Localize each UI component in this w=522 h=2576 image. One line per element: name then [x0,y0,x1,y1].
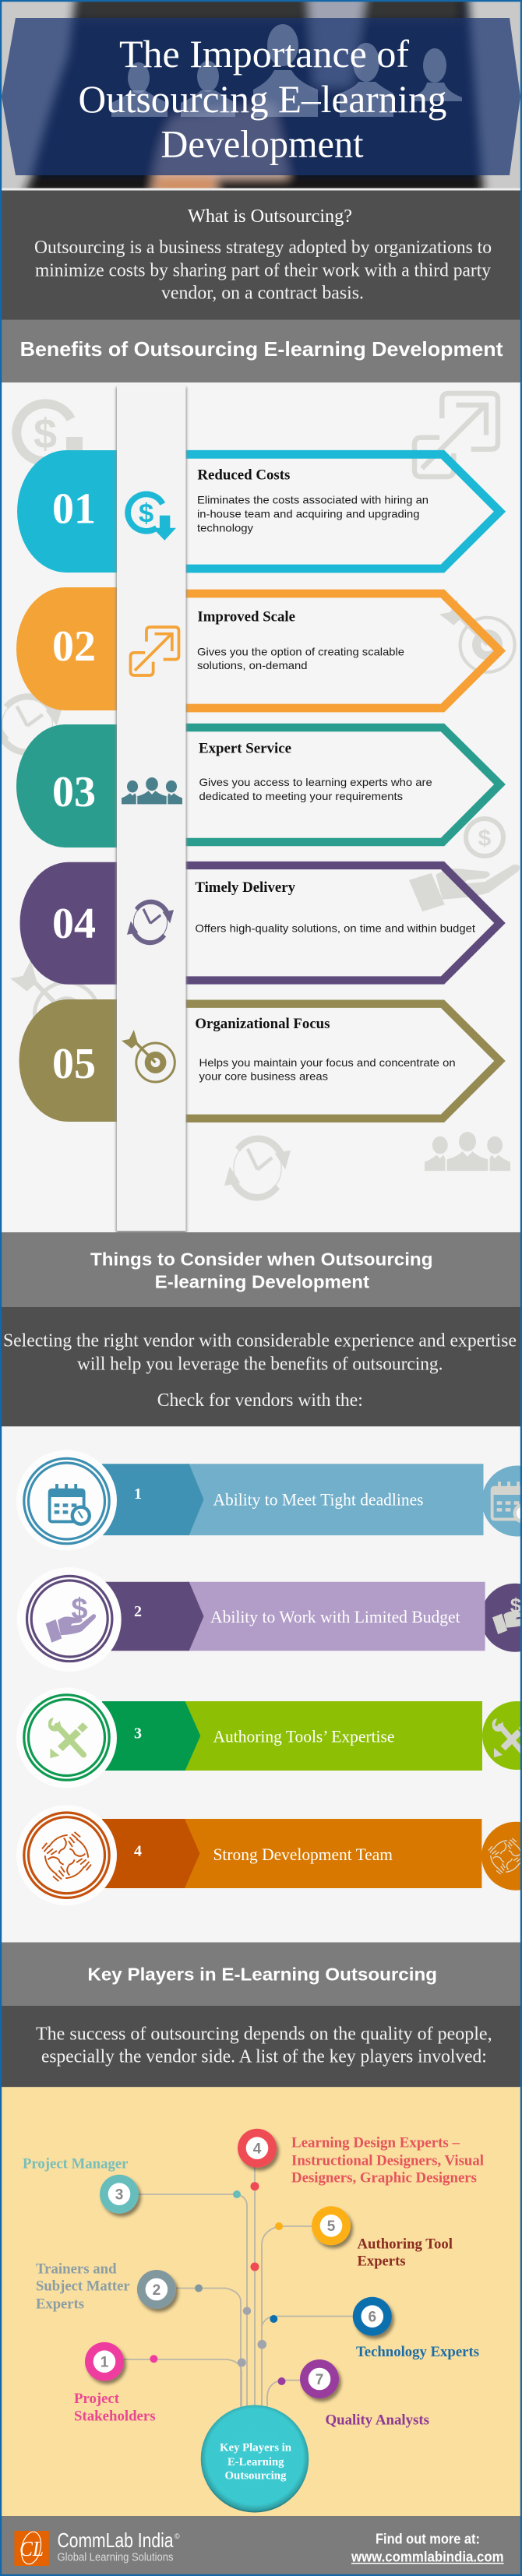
right circle with ghost hand [481,1584,522,1652]
find out more [351,2532,504,2564]
node 5: authoring tool experts: Authoring Tool [357,2236,453,2253]
logo: CommLab India: CommLab India [58,2528,174,2552]
central pillar [116,386,187,1232]
badge with tools icon [16,1687,117,1788]
connector dots [150,2182,285,2385]
find out more: www.commlabindia.com [351,2549,504,2564]
benefit text: organizational focus: Helps you maintain your focus and concentrate on [199,1056,456,1069]
node 6: technology experts [353,2297,479,2360]
node 4: learning design experts: Learning Design Experts – [291,2135,460,2151]
panel: key players diagram [0,2087,522,2516]
icon: expert team [122,777,182,804]
logo: CommLab India: © [175,2532,180,2540]
text: outsourcing definition [34,238,492,303]
logo: CommLab India: CL [19,2537,44,2560]
node 3: project manager: Project Manager [23,2155,129,2172]
node 7: quality analysts: 7 [316,2372,323,2388]
icon: target with arrow [122,1030,175,1082]
panel: success of outsourcing: especially the vendor side. A list of the key players involved: [41,2046,487,2067]
benefit text: improved scale: Gives you the option of creating scalable [197,646,404,658]
ribbon 3 [102,1701,482,1771]
ribbon 2: 2 [134,1603,142,1620]
right circle with ghost hand: $ [510,1594,522,1617]
right circle with ghost tools [482,1701,522,1770]
checklist row 3 [16,1687,522,1788]
node 2: trainers and subject matter experts: Trainers and [36,2261,117,2277]
icon: clock with arrows [127,902,174,943]
find out more: Find out more at: [376,2532,480,2547]
icon: team silhouettes [111,24,462,117]
node 4: learning design experts [238,2129,484,2187]
benefit 04 badge [20,862,117,985]
benefit text: expert service: Expert Service [199,741,291,757]
benefit text: organizational focus [195,1016,456,1083]
benefit 03 badge: 03 [52,768,96,816]
node 2: trainers and subject matter experts: 2 [153,2282,160,2299]
benefit 05 badge: 05 [52,1040,96,1088]
benefit text: improved scale: Improved Scale [197,608,295,625]
badge with hand icon: $ [71,1593,88,1626]
benefit 01 badge [17,450,117,573]
benefit text: timely delivery: Offers high-quality solutions, on time and within budget [195,922,475,935]
panel: benefits heading [0,319,522,382]
benefit text: expert service: dedicated to meeting your requirements [199,790,403,802]
background ghost icons: $ [478,826,492,851]
node 5: authoring tool experts [312,2206,453,2269]
badge with hand icon [17,1567,122,1672]
central circle: key players: E-Learning [227,2456,284,2469]
right circle with ghost calendar [481,1466,522,1536]
benefit text: timely delivery [195,879,475,935]
node 7: quality analysts: Quality Analysts [326,2412,429,2428]
benefit 01 badge: 01 [52,485,96,534]
benefit 04 arrow outline [185,865,500,980]
node 3: project manager: 3 [115,2187,123,2203]
node 2: trainers and subject matter experts [36,2261,176,2312]
benefit text: organizational focus: your core business areas [199,1070,328,1083]
benefit 05 badge [19,999,117,1122]
node 1: project stakeholders [74,2342,156,2424]
ribbon 4: 4 [134,1843,142,1860]
ribbon 2: Ability to Work with Limited Budget [210,1607,460,1626]
ribbon 2 [105,1582,485,1651]
benefit text: reduced costs: Reduced Costs [197,467,290,484]
panel: things to consider heading: Things to Consider when Outsourcing [90,1249,433,1269]
logo: CommLab India: Global Learning Solutions [58,2551,173,2564]
hexagon title banner [2,18,520,175]
title [78,32,447,165]
text: outsourcing definition: Outsourcing is a business strategy adopted by organizations to [34,238,492,258]
node 6: technology experts: Technology Experts [356,2344,479,2360]
badge with calendar icon [16,1450,117,1550]
panel: benefits heading: Benefits of Outsourcing E-learning Development [20,337,503,361]
central circle: key players: Key Players in [220,2442,292,2454]
benefit text: reduced costs [197,467,429,534]
text: outsourcing definition: minimize costs by sharing part of their work with a third party [35,260,491,280]
node 4: learning design experts: Designers, Graphic Designers [291,2170,477,2187]
ribbon 1: Ability to Meet Tight deadlines [213,1490,424,1510]
benefit text: reduced costs: in-house team and acquiring and upgrading [197,508,419,520]
node 6: technology experts: 6 [369,2309,376,2326]
panel: what is outsourcing [0,190,522,319]
panel: things to consider heading [0,1232,522,1307]
white divider [0,189,522,190]
panel: things to consider heading: E-learning Development [155,1271,369,1292]
panel: success of outsourcing [0,2006,522,2087]
benefit 04 badge: 04 [52,900,96,948]
node 5: authoring tool experts: 5 [327,2218,336,2235]
benefit 02 badge [16,587,117,710]
node 1: project stakeholders: Project [74,2391,120,2407]
benefit text: expert service: Gives you access to learning experts who are [199,776,432,788]
benefit text: timely delivery: Timely Delivery [195,879,295,896]
panel: key players heading: Key Players in E-Learning Outsourcing [87,1965,437,1985]
node 1: project stakeholders: Stakeholders [74,2408,156,2424]
checklist row 2 [17,1567,522,1672]
checklist row 4 [16,1805,522,1905]
node 4: learning design experts: 4 [253,2141,262,2158]
connector lines [124,2165,354,2411]
central circle: key players: Outsourcing [224,2470,287,2483]
heading: what is outsourcing: What is Outsourcing? [188,206,352,227]
title: The Importance of [119,32,409,76]
ribbon 1 [102,1464,483,1535]
panel: selecting the right vendor: Check for vendors with the: [157,1390,363,1411]
benefit text: improved scale: solutions, on-demand [197,659,307,671]
badge with team hands icon [16,1805,117,1905]
panel: selecting the right vendor [0,1307,522,1426]
text: outsourcing definition: vendor, on a contract basis. [161,283,364,303]
title: Outsourcing E–learning [78,77,447,121]
panel: selecting the right vendor: will help you leverage the benefits of outsourcing. [77,1354,443,1374]
node 2: trainers and subject matter experts: Experts [36,2296,84,2312]
panel: selecting the right vendor: Selecting the right vendor with considerable experience and expertise [3,1330,517,1351]
logo: CommLab India [14,2528,180,2566]
benefit text: expert service [199,741,432,802]
node 2: trainers and subject matter experts: Subject Matter [36,2278,130,2295]
title: Development [160,122,364,165]
panel: benefits section [0,382,522,1234]
panel: key players heading [0,1943,522,2006]
hero banner [0,0,522,196]
central circle: key players [201,2405,309,2513]
benefit 02 badge: 02 [52,622,96,671]
benefit 05 arrow outline [185,1004,500,1119]
ribbon 3: Authoring Tools’ Expertise [213,1727,394,1746]
right circle with ghost hands [481,1822,522,1891]
icon: scale arrows [131,627,179,675]
node 4: learning design experts: Instructional Designers, Visual [291,2152,484,2169]
node 5: authoring tool experts: Experts [357,2253,405,2269]
benefit 03 badge [16,724,117,848]
node 7: quality analysts [300,2359,429,2428]
ribbon 4: Strong Development Team [213,1845,393,1864]
checklist row 1 [16,1450,522,1550]
hero photo: businessman pointing [0,0,522,196]
benefit text: organizational focus: Organizational Focus [195,1016,330,1032]
node 1: project stakeholders: 1 [101,2354,109,2371]
icon: dollar with down arrow [128,494,176,541]
benefit text: reduced costs: Eliminates the costs associated with hiring an [197,494,429,506]
panel: vendor checklist [0,1426,522,1942]
panel: success of outsourcing: The success of outsourcing depends on the quality of people, [36,2024,492,2044]
ribbon 1: 1 [134,1485,142,1503]
benefit text: reduced costs: technology [197,521,253,534]
ribbon 3: 3 [134,1725,142,1743]
footer [0,2516,522,2576]
ribbon 4 [102,1819,481,1888]
benefit 01 arrow outline [185,454,500,569]
node 3: project manager [23,2155,139,2214]
background ghost icons [0,393,520,1197]
benefit 02 arrow outline [185,594,500,708]
benefit text: improved scale [197,608,404,671]
benefit 03 arrow outline [185,728,500,842]
